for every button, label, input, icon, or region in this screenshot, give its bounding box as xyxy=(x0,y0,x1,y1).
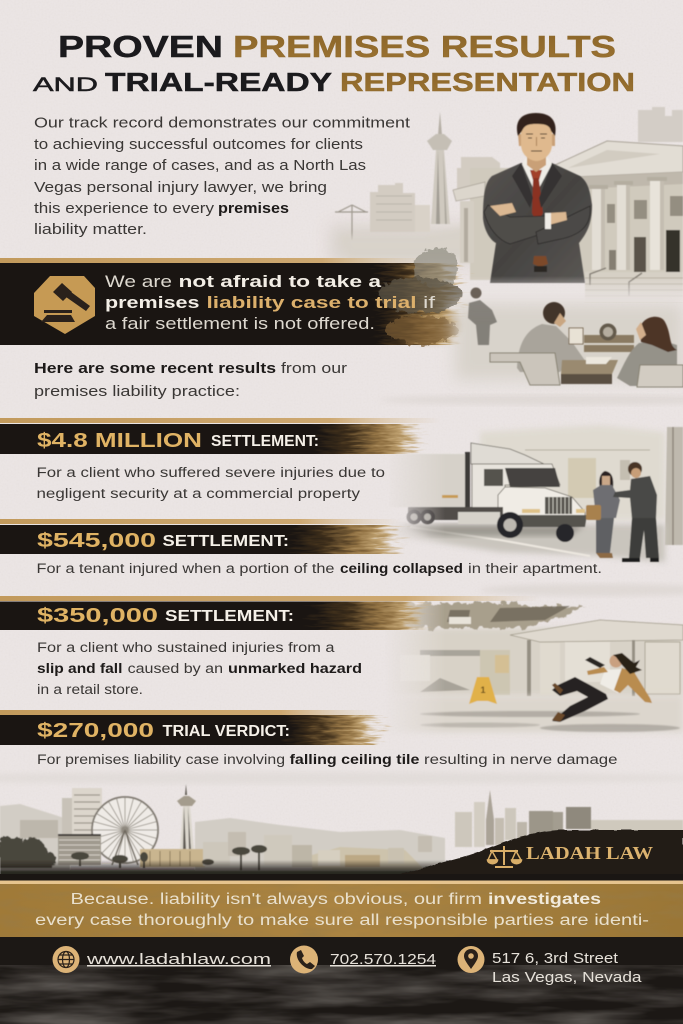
result bar 2: $545,000 xyxy=(0,519,400,554)
wet floor sign xyxy=(469,677,497,704)
result 3 text: caused by an xyxy=(128,661,223,676)
gold band: every case thoroughly to make sure all responsible parties are identi- xyxy=(35,912,649,929)
low striped building xyxy=(58,835,101,865)
hair xyxy=(517,113,556,136)
ears xyxy=(518,134,555,146)
intro paragraph: premises xyxy=(218,201,289,217)
left hotel xyxy=(62,788,102,835)
seated man xyxy=(517,302,586,372)
wheels xyxy=(497,512,523,538)
title xyxy=(33,29,635,97)
result bar 4: $270,000: $270,000 xyxy=(37,720,154,742)
columns xyxy=(589,177,667,270)
result bar 1: $4.8 million: SETTLEMENT: xyxy=(211,433,319,450)
roof edge xyxy=(510,620,683,642)
shirt and tie xyxy=(522,158,552,194)
tablet xyxy=(569,328,583,344)
banner text: liability case to trial xyxy=(206,294,416,312)
banner text: a fair settlement is not offered. xyxy=(105,315,375,333)
address: Las Vegas, Nevada xyxy=(492,969,642,986)
intro paragraph xyxy=(34,116,410,238)
hood xyxy=(498,487,585,517)
fairing xyxy=(471,443,544,464)
neck xyxy=(527,152,546,172)
icon: globe xyxy=(52,946,80,973)
trailer xyxy=(403,454,466,508)
tan casino xyxy=(140,849,205,867)
courthouse wall xyxy=(470,168,683,280)
intro paragraph: Vegas personal injury lawyer, we bring xyxy=(34,180,327,196)
footer xyxy=(0,937,683,1024)
Stratosphere tower xyxy=(177,784,196,850)
result 4 text: resulting in nerve damage xyxy=(424,752,618,767)
result 1 text xyxy=(36,465,385,501)
result 3 text: unmarked hazard xyxy=(228,661,362,676)
standing man xyxy=(468,288,497,345)
woman in conversation xyxy=(586,471,620,558)
banner text xyxy=(105,273,436,333)
result 4 text: falling ceiling tile xyxy=(290,752,420,767)
result 3 text: in a retail store. xyxy=(37,682,143,697)
eyes and mouth xyxy=(526,134,547,151)
wing left xyxy=(453,182,485,201)
ground shadow xyxy=(0,860,683,881)
result 1 text: For a client who suffered severe injuries due to xyxy=(36,465,385,480)
intro paragraph: to achieving successful outcomes for clients xyxy=(34,137,363,153)
chassis xyxy=(408,507,503,520)
face xyxy=(521,118,552,161)
falling woman xyxy=(552,653,652,722)
illustration: truck scene xyxy=(390,425,683,562)
results intro: Here are some recent results xyxy=(34,361,276,377)
desk xyxy=(584,335,634,352)
illustration: slip and fall scene xyxy=(380,603,683,732)
result bar 3: $350,000 xyxy=(0,596,540,630)
windows and doors xyxy=(607,196,683,272)
ferris wheel xyxy=(92,797,158,865)
phone number: 702.570.1254 xyxy=(330,951,436,968)
right towers xyxy=(455,790,683,847)
road xyxy=(390,524,665,562)
intro paragraph: this experience to every xyxy=(34,201,215,217)
floor xyxy=(380,696,683,732)
address: 517 6, 3rd Street xyxy=(492,950,619,967)
result bar 3: $350,000: SETTLEMENT: xyxy=(165,608,294,625)
mid building behind xyxy=(457,157,500,193)
results intro: premises liability practice: xyxy=(34,384,240,400)
result bar 2: $545,000: $545,000 xyxy=(37,530,156,552)
title: PROVEN xyxy=(58,29,223,64)
jacket and torso xyxy=(600,669,622,693)
icon: location pin xyxy=(458,946,484,973)
papers and table xyxy=(561,360,618,374)
result 4 text xyxy=(37,752,618,767)
low city base xyxy=(340,226,470,258)
bumper xyxy=(516,515,587,527)
result 2 text: ceiling collapsed xyxy=(340,561,463,576)
result bar 3: $350,000: $350,000 xyxy=(37,605,158,627)
illustration: Las Vegas skyline xyxy=(0,784,683,881)
illustration: city and courthouse xyxy=(330,107,683,302)
clock xyxy=(600,324,616,340)
banner text: premises xyxy=(105,294,200,312)
result 2 text xyxy=(36,561,602,576)
trees and palms xyxy=(0,837,267,870)
website: www.ladahlaw.com xyxy=(86,951,271,968)
title: PREMISES RESULTS xyxy=(233,29,616,64)
title: REPRESENTATION xyxy=(340,69,635,97)
banner text: if xyxy=(423,294,436,312)
building backdrop xyxy=(480,425,665,520)
illustration: slip and fall scene: 1 xyxy=(480,685,486,695)
icon: gavel xyxy=(34,276,95,334)
woman xyxy=(617,317,677,386)
banner text: We are xyxy=(105,273,172,291)
distant skyscrapers top right xyxy=(638,107,683,142)
results intro: from our xyxy=(281,361,347,377)
Stratosphere tower xyxy=(427,112,452,224)
banner text: not afraid to take a xyxy=(178,273,382,291)
distant hills xyxy=(0,804,445,870)
result bar 4: $270,000: TRIAL VERDICT: xyxy=(162,723,290,740)
result bar 4: $270,000 xyxy=(0,710,380,745)
steps xyxy=(585,268,683,302)
intro paragraph: Our track record demonstrates our commitment xyxy=(34,116,410,132)
results intro xyxy=(34,361,347,400)
gold band xyxy=(0,880,683,937)
intro paragraph: liability matter. xyxy=(34,222,147,238)
grille xyxy=(545,497,572,514)
result bar 1: $4.8 million xyxy=(0,418,440,454)
suit body xyxy=(483,163,592,283)
icon: scales xyxy=(488,846,522,867)
gold band: investigates xyxy=(488,891,601,908)
mist below lawyer xyxy=(440,276,683,302)
head and hair xyxy=(610,654,622,668)
banner: not afraid xyxy=(0,248,462,345)
man in conversation xyxy=(613,462,659,562)
result 2 text: For a tenant injured when a portion of the xyxy=(36,561,334,576)
torn ceiling xyxy=(380,603,586,628)
result 3 text: slip and fall xyxy=(37,661,122,676)
result 3 text: For a client who sustained injuries from a xyxy=(37,640,335,655)
icon: phone xyxy=(290,946,318,974)
cab xyxy=(472,464,560,510)
gold band: Because. liability isn't always obvious, our firm xyxy=(70,891,482,908)
title: TRIAL-READY xyxy=(105,69,332,97)
result 4 text: For premises liability case involving xyxy=(37,752,285,767)
dark hill with logo xyxy=(0,830,683,881)
pediment xyxy=(553,141,683,178)
logo text: LADAH LAW xyxy=(526,843,653,863)
mid buildings xyxy=(203,832,432,870)
illustration: lawyer xyxy=(483,113,592,283)
result 3 text xyxy=(37,640,362,697)
legs xyxy=(552,677,608,722)
result 2 text: in their apartment. xyxy=(468,561,602,576)
illustration: client meeting xyxy=(455,288,683,387)
address xyxy=(492,950,642,986)
truck xyxy=(390,443,587,542)
wash behind city xyxy=(330,225,480,263)
crossed arms xyxy=(484,205,560,244)
chair backs xyxy=(490,353,560,385)
crane xyxy=(335,205,368,240)
result bar 1: $4.8 million: $4.8 MILLION xyxy=(37,430,202,452)
lapels xyxy=(512,163,562,208)
result bar 2: $545,000: SETTLEMENT: xyxy=(162,533,289,550)
store front xyxy=(380,628,683,696)
left towers xyxy=(370,183,430,232)
intro paragraph: in a wide range of cases, and as a North Las xyxy=(34,158,366,174)
title: AND xyxy=(33,74,98,96)
result 1 text: negligent security at a commercial property xyxy=(36,486,360,501)
bush xyxy=(378,248,462,344)
